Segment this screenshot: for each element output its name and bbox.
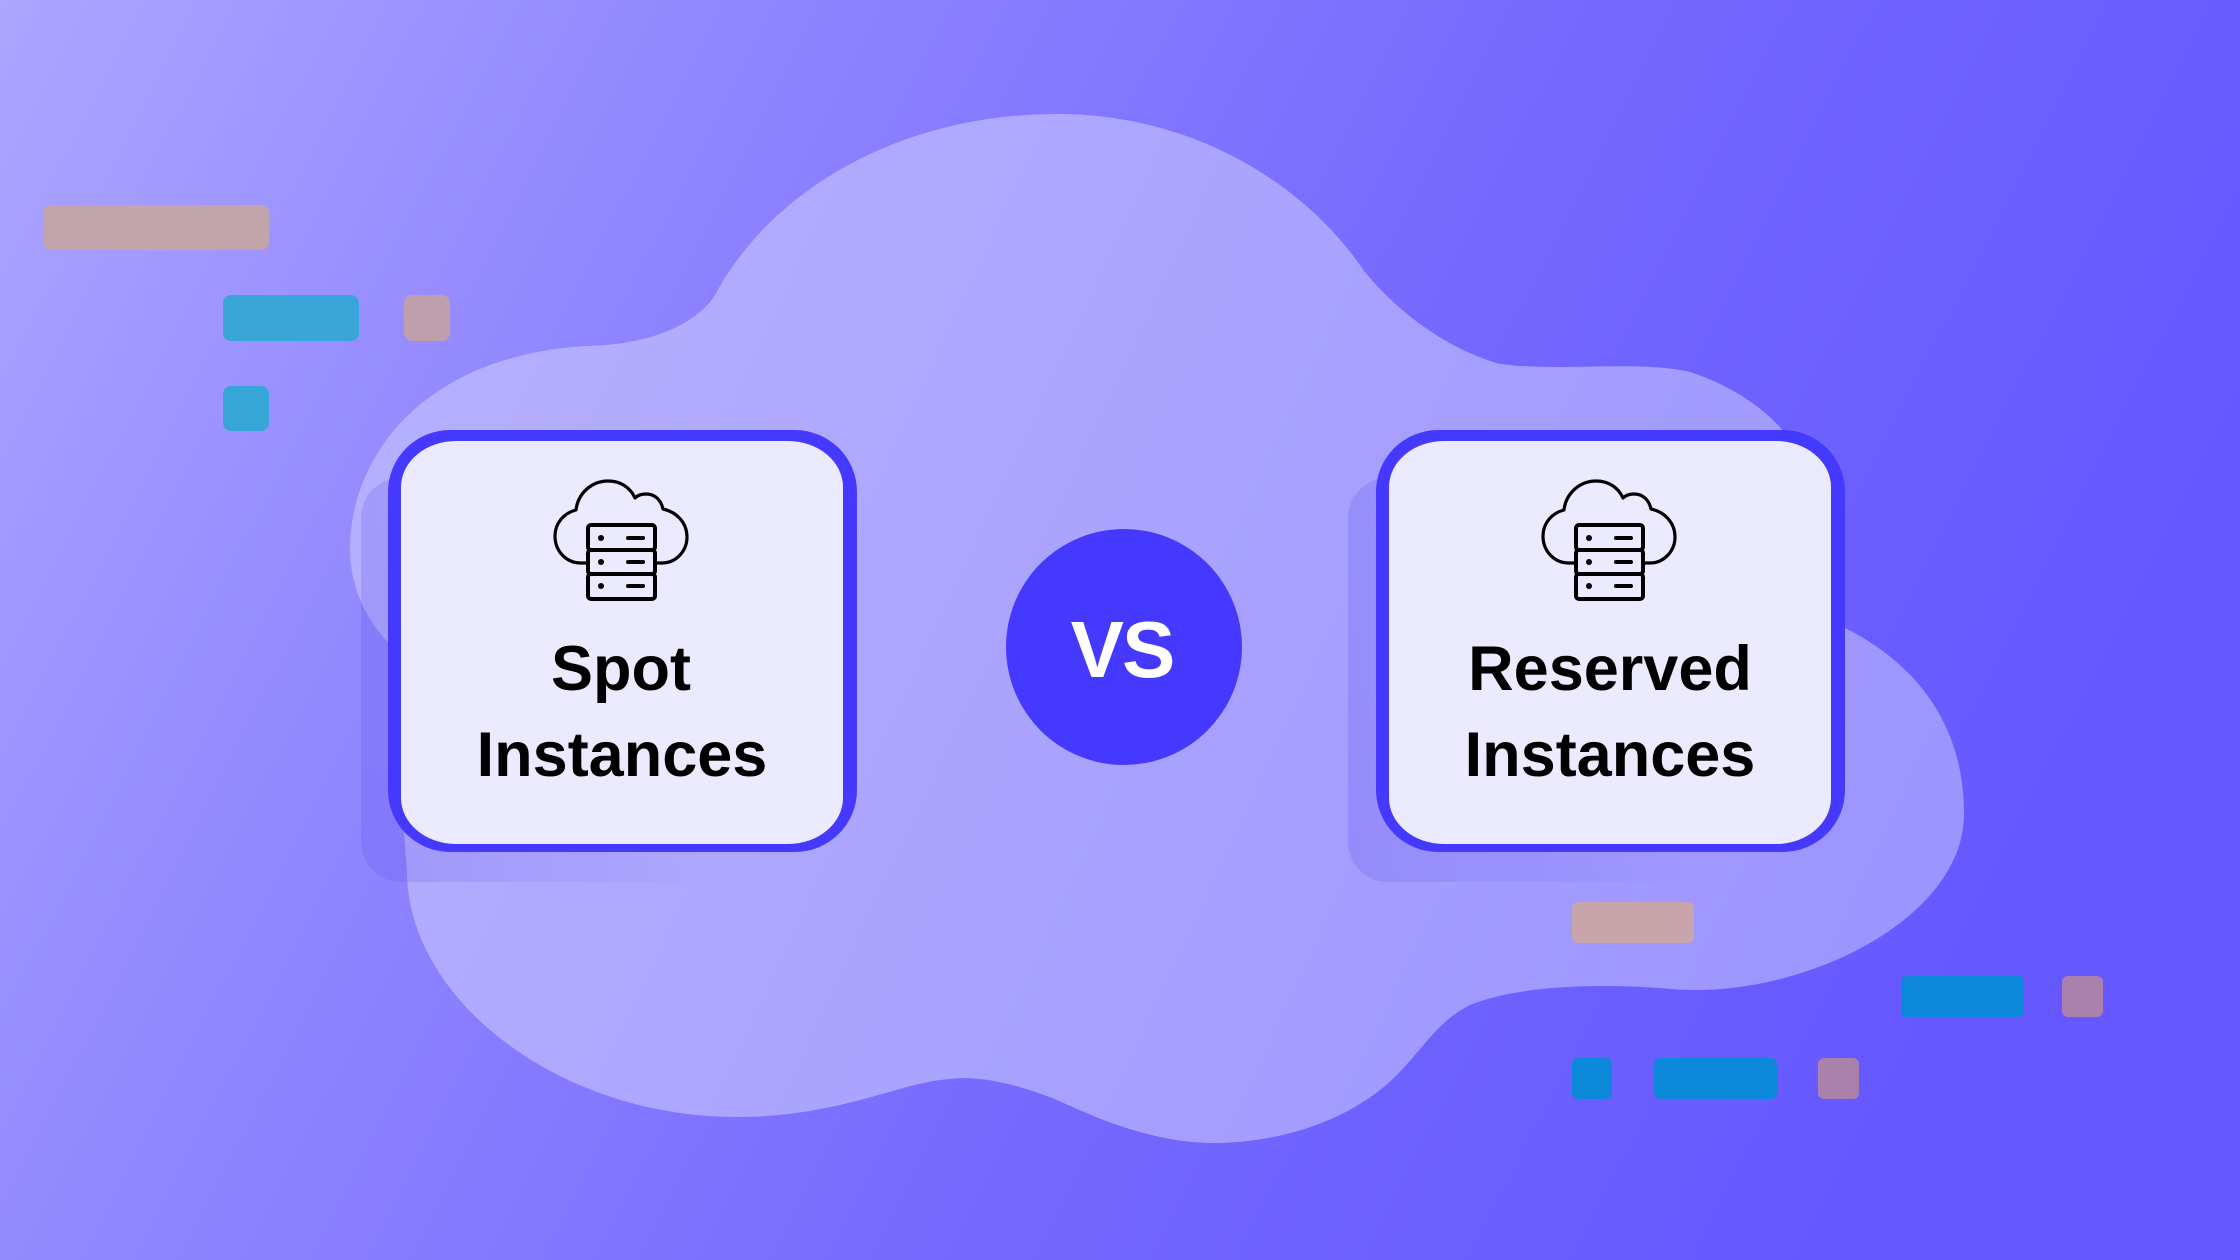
mauve square upper — [2062, 976, 2103, 1017]
decorative blocks: bottom right — [1572, 902, 2103, 1099]
card face — [1389, 441, 1831, 844]
blue bar lower — [1654, 1058, 1777, 1099]
card shadow — [361, 478, 861, 882]
blue square — [1572, 1058, 1612, 1099]
background blob — [350, 114, 1964, 1143]
panel: spot instances — [361, 430, 861, 882]
card border — [1376, 430, 1845, 852]
blue bar upper — [1901, 976, 2024, 1017]
heading: Spot Instances: Spot — [551, 634, 691, 704]
pink bar — [1572, 902, 1694, 943]
mauve square lower — [1818, 1058, 1859, 1099]
card face — [401, 441, 843, 844]
icon: cloud server — [555, 481, 687, 599]
card border — [388, 430, 857, 852]
teal square — [223, 386, 269, 431]
heading: Reserved Instances: Instances — [1465, 720, 1755, 790]
pink square — [404, 295, 450, 341]
card shadow — [1348, 478, 1848, 882]
vs circle — [1006, 529, 1242, 765]
icon: cloud server — [1543, 481, 1675, 599]
decorative blocks: top left — [43, 205, 450, 431]
panel: reserved instances — [1348, 430, 1848, 882]
teal bar — [223, 295, 359, 341]
vs badge — [1006, 529, 1242, 765]
heading: Spot Instances: Instances — [477, 720, 767, 790]
heading: Reserved Instances: Reserved — [1468, 634, 1752, 704]
pink bar — [43, 205, 269, 250]
vs label: VS — [1071, 605, 1173, 694]
